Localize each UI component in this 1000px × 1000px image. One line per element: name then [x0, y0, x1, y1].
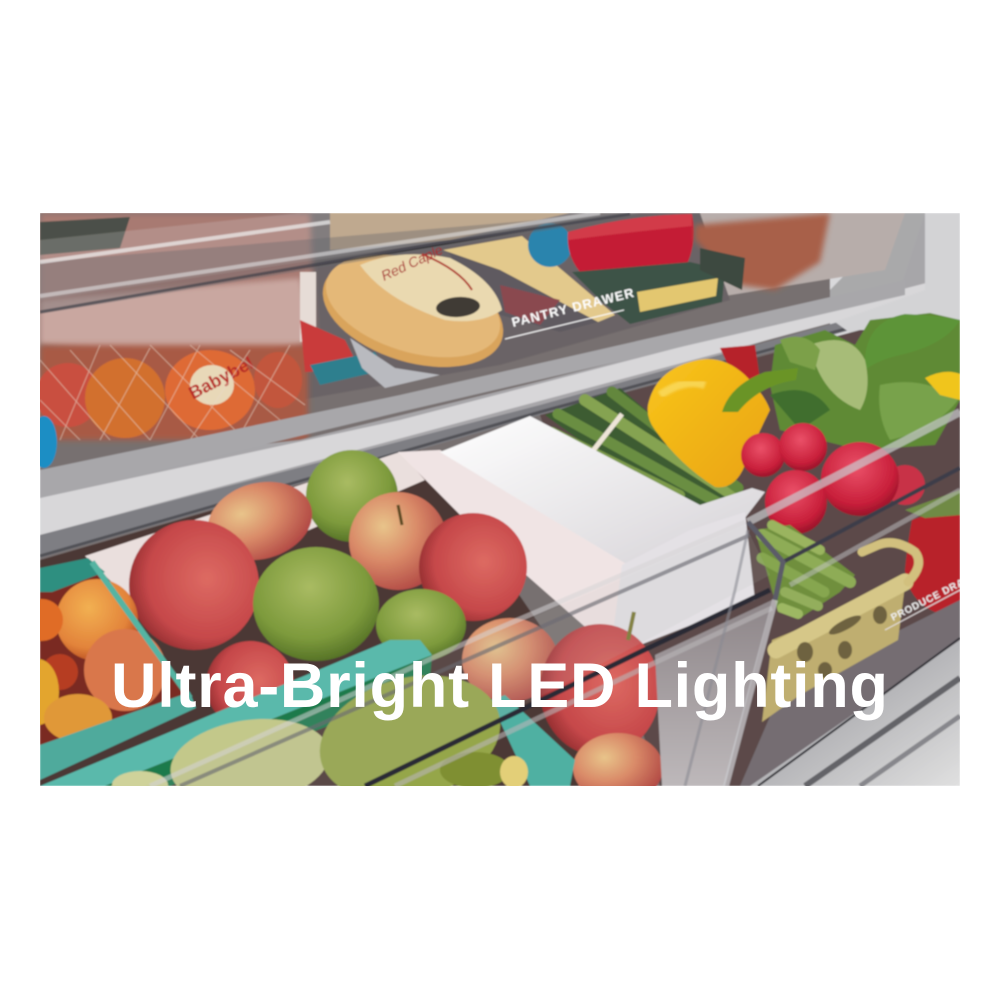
photo: refrigerator drawers — [40, 213, 960, 786]
red pepper right — [905, 513, 960, 612]
title: Ultra-Bright LED Lighting — [111, 651, 888, 721]
leafy greens — [770, 313, 960, 450]
pantry drawer shelf — [40, 213, 960, 558]
cheese wedge — [443, 236, 615, 322]
round cheese: Red Caple — [379, 241, 445, 284]
wall right of shelf — [836, 284, 960, 332]
teal basket front — [40, 640, 575, 786]
drawer glass corner panel — [655, 600, 772, 786]
refrigerator right wall — [700, 213, 926, 337]
teal basket left — [40, 558, 196, 780]
radishes — [741, 423, 925, 534]
pantry drawer contents — [31, 213, 830, 468]
foil wrapper — [350, 338, 440, 388]
floor of lower drawer — [740, 600, 960, 786]
netted sausages — [36, 345, 308, 440]
produce drawer label: PRODUCE DRAWER — [889, 566, 989, 624]
red cheese wheel — [568, 214, 694, 274]
white divider bin — [398, 416, 765, 645]
round cheese — [322, 246, 504, 368]
red pepper behind — [720, 345, 760, 380]
pantry drawer label: PANTRY DRAWER — [510, 285, 636, 330]
white rear wall of bin — [85, 452, 425, 605]
infographic canvas — [40, 213, 960, 786]
dark interior — [300, 213, 730, 400]
produce drawer label — [884, 578, 960, 632]
produce drawer background — [540, 330, 960, 786]
produce drawer glass front — [145, 412, 960, 786]
asparagus — [545, 388, 745, 510]
pantry drawer glass top rail — [40, 213, 640, 314]
peaches — [40, 574, 180, 746]
asparagus stalks in drawer front — [755, 525, 855, 618]
tan package behind rail — [330, 213, 570, 250]
snack packets — [300, 320, 360, 372]
netted sausages: Babybel — [185, 353, 257, 403]
blue object — [40, 414, 58, 469]
pecan tray — [695, 213, 830, 290]
beige basket — [762, 543, 919, 722]
green cheese box — [572, 262, 725, 324]
pears in front basket — [110, 674, 530, 786]
blue netted ball — [528, 223, 572, 267]
wrapped meat — [40, 213, 316, 360]
yellow pepper — [648, 359, 798, 487]
apples — [129, 450, 663, 803]
